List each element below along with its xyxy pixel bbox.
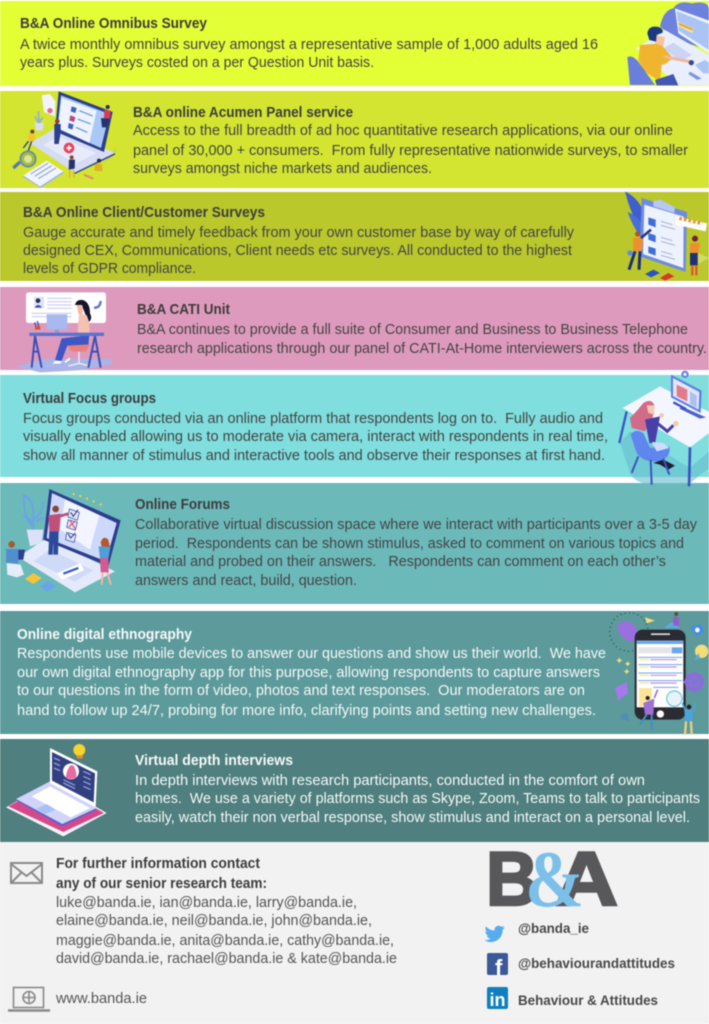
icon: man at computer — [627, 2, 709, 85]
icon: envelope — [11, 863, 42, 883]
text: depth interviews description: easily, watch their non verbal response, show stimulus and interact on a personal level. — [135, 809, 690, 826]
text: email addresses: luke@banda.ie, ian@banda.ie, larry@banda.ie, — [56, 894, 357, 911]
text: twitter handle: @banda_ie — [518, 920, 589, 936]
heading: digital ethnography: Online digital ethnography — [17, 626, 193, 643]
text: website: www.banda.ie — [55, 990, 147, 1007]
panel: CATI unit — [0, 287, 709, 372]
text: depth interviews description — [135, 772, 700, 826]
icon: linkedin: in — [490, 990, 506, 1010]
heading: CATI: B&A CATI Unit — [137, 301, 230, 318]
text: forums description: Collaborative virtual discussion space where we interact with participants over a 3-5 day — [135, 516, 697, 533]
icon: laptop with video portrait — [6, 744, 107, 836]
text: focus groups description: visually enabled allowing us to moderate via camera, interact with respondents in real time, — [23, 428, 608, 445]
text: forums description: period. Respondents can be shown stimulus, asked to comment on various topics and — [135, 535, 684, 552]
text: focus groups description: Focus groups conducted via an online platform that respondents log on to. Fully audio and — [23, 410, 603, 427]
icon: facebook: f — [495, 955, 503, 980]
logo: B&A: B — [486, 837, 538, 922]
logo: B&A: A — [555, 837, 618, 922]
text: CATI description: B&A continues to provide a full suite of Consumer and Business to Business Telephone — [137, 321, 688, 338]
text: depth interviews description: In depth interviews with research participants, conducted in the comfort of own — [135, 772, 645, 789]
text: client surveys description: Gauge accurate and timely feedback from your own customer base by way of carefully — [23, 224, 574, 241]
text: digital ethnography description: to our questions in the form of video, photos and text responses. Our moderators are on — [17, 682, 585, 699]
icon: laptop globe — [8, 988, 50, 1010]
text: digital ethnography description: hand to follow up 24/7, probing for more info, clarifying points and setting new challenges. — [17, 702, 596, 719]
panel: client customer surveys — [0, 191, 709, 281]
text: linkedin name: Behaviour & Attitudes — [518, 992, 658, 1008]
text: acumen description: panel of 30,000 + consumers. From fully representative nationwide surveys, to smaller — [133, 142, 688, 159]
text: omnibus description: A twice monthly omnibus survey amongst a representative sample of 1,000 adults aged 16 — [20, 36, 598, 53]
heading: contact: For further information contact — [56, 855, 260, 872]
text: focus groups description — [23, 410, 608, 464]
heading: contact — [56, 855, 267, 892]
text: omnibus description — [20, 36, 598, 71]
text: digital ethnography description: our own digital ethnography app for this purpose, allowing respondents to capture answers — [17, 664, 600, 681]
text: facebook handle: @behaviourandattitudes — [518, 955, 675, 971]
text: forums description — [135, 516, 697, 589]
logo: B&A — [486, 836, 618, 924]
heading: depth interviews: Virtual depth interviews — [135, 752, 293, 769]
icon: twitter — [485, 926, 505, 942]
text: digital ethnography description — [17, 645, 606, 719]
panel: virtual depth interviews — [0, 739, 709, 842]
icon: telephone interviewer at desk — [17, 292, 113, 372]
text: acumen description: surveys amongst niche markets and audiences. — [133, 160, 432, 177]
heading: omnibus: B&A Online Omnibus Survey — [20, 15, 208, 32]
logo: B&A: & — [525, 836, 584, 924]
heading: forums: Online Forums — [135, 496, 230, 513]
icon: clipboard checklist with people — [625, 191, 709, 281]
icon: facebook — [487, 953, 508, 980]
text: email addresses: david@banda.ie, rachael@banda.ie & kate@banda.ie — [56, 950, 397, 967]
icon: linkedin — [487, 987, 508, 1010]
text: client surveys description: designed CEX, Communications, Client needs etc surveys. All conducted to the highest — [23, 242, 573, 259]
text: omnibus description: years plus. Surveys costed on a per Question Unit basis. — [20, 54, 374, 71]
heading: focus groups: Virtual Focus groups — [23, 390, 156, 407]
icon: mobile phone with researchers — [610, 612, 708, 735]
icon: woman at desk on video call — [619, 371, 709, 486]
text: acumen description: Access to the full breadth of ad hoc quantitative research applications, via our online — [133, 122, 673, 139]
panel: online digital ethnography — [0, 611, 709, 735]
text: email addresses: maggie@banda.ie, anita@banda.ie, cathy@banda.ie, — [56, 932, 394, 949]
icon: laptop with survey and people — [13, 91, 117, 188]
icon: people around laptop checklist — [6, 489, 121, 592]
text: email addresses: elaine@banda.ie, neil@banda.ie, john@banda.ie, — [56, 912, 372, 929]
panel: online forums — [0, 483, 709, 604]
heading: acumen: B&A online Acumen Panel service — [133, 104, 353, 121]
text: email addresses — [56, 894, 397, 967]
text: acumen description — [133, 122, 688, 177]
panel: online omnibus survey — [0, 1, 709, 86]
heading: client surveys: B&A Online Client/Customer Surveys — [23, 204, 265, 221]
heading: contact: any of our senior research team: — [56, 875, 267, 892]
text: client surveys description — [23, 224, 574, 277]
text: focus groups description: show all manner of stimulus and interactive tools and observe their responses at first hand. — [23, 447, 605, 464]
text: forums description: answers and react, build, question. — [135, 572, 357, 589]
text: client surveys description: levels of GDPR compliance. — [23, 260, 196, 277]
text: forums description: material and probed on their answers. Respondents can comment on each other’s — [135, 553, 666, 570]
text: digital ethnography description: Respondents use mobile devices to answer our questions and show us their world. We have — [17, 645, 606, 662]
panel: acumen panel service — [0, 91, 709, 188]
text: CATI description — [137, 321, 707, 357]
panel: contact footer — [0, 836, 709, 1024]
panel: virtual focus groups — [0, 371, 709, 486]
